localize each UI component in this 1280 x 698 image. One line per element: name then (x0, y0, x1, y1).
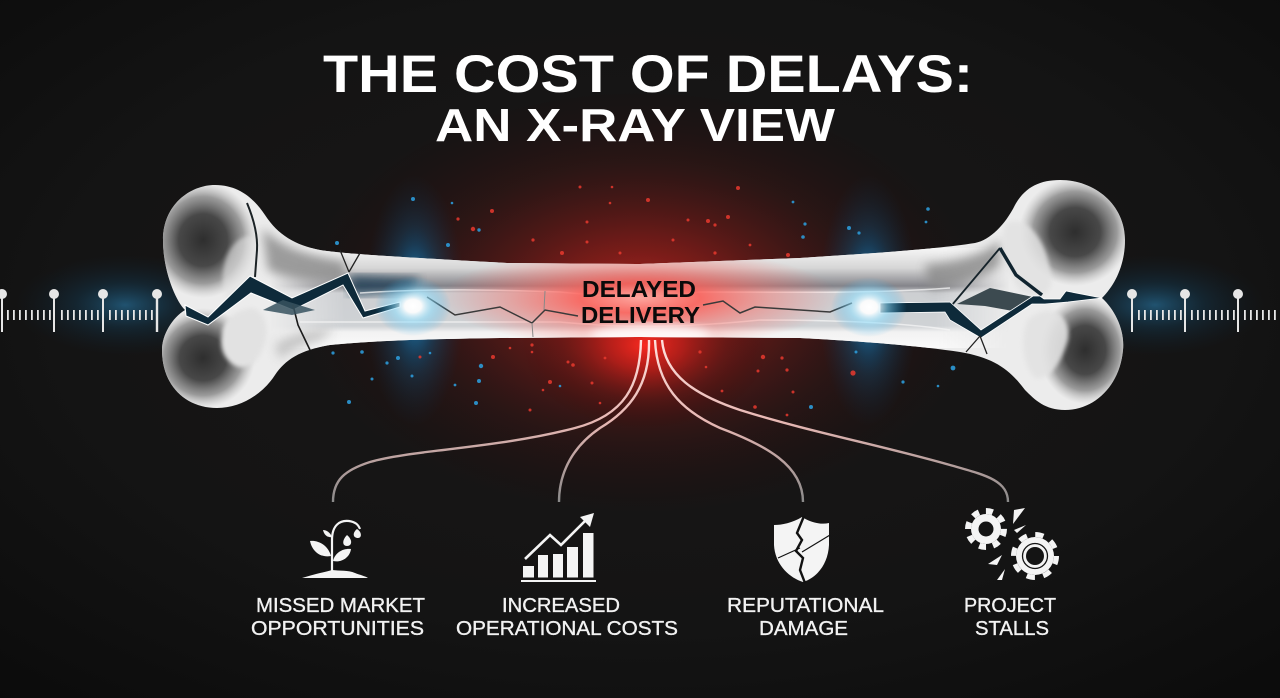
red particles (418, 186, 856, 416)
label: project stalls: PROJECT (964, 594, 1056, 617)
label: project stalls (964, 594, 1056, 640)
icon: cracked shield (774, 516, 830, 583)
label: reputational damage: REPUTATIONAL (727, 594, 884, 617)
center label: DELAYED (582, 276, 696, 302)
center label (581, 276, 700, 328)
blue particles (331, 197, 955, 409)
timeline right (1127, 289, 1276, 332)
icon: wilting plant (302, 521, 368, 578)
label: missed market opportunities (251, 594, 425, 640)
glow points (375, 276, 907, 337)
left cracks (185, 203, 578, 350)
label: increased operational costs (456, 594, 678, 640)
fractured bone x-ray (149, 170, 1140, 420)
connectors (333, 340, 1008, 502)
title: AN X-RAY VIEW (435, 99, 836, 151)
label: increased operational costs: INCREASED (502, 594, 620, 617)
title: THE COST OF DELAYS: (323, 45, 973, 104)
icon: broken gears (968, 508, 1056, 580)
label: project stalls: STALLS (975, 617, 1049, 640)
tube lines (300, 288, 950, 330)
center label: DELIVERY (581, 302, 700, 328)
timeline left (0, 289, 162, 332)
label: reputational damage (727, 594, 884, 640)
right cracks (703, 248, 1102, 354)
title (323, 45, 973, 151)
label: missed market opportunities: MISSED MARKET (256, 594, 425, 617)
red tint (451, 260, 829, 338)
icon: rising cost chart (521, 513, 596, 582)
label: increased operational costs: OPERATIONAL COSTS (456, 617, 678, 640)
label: missed market opportunities: OPPORTUNITIES (251, 617, 424, 640)
label: reputational damage: DAMAGE (759, 617, 848, 640)
